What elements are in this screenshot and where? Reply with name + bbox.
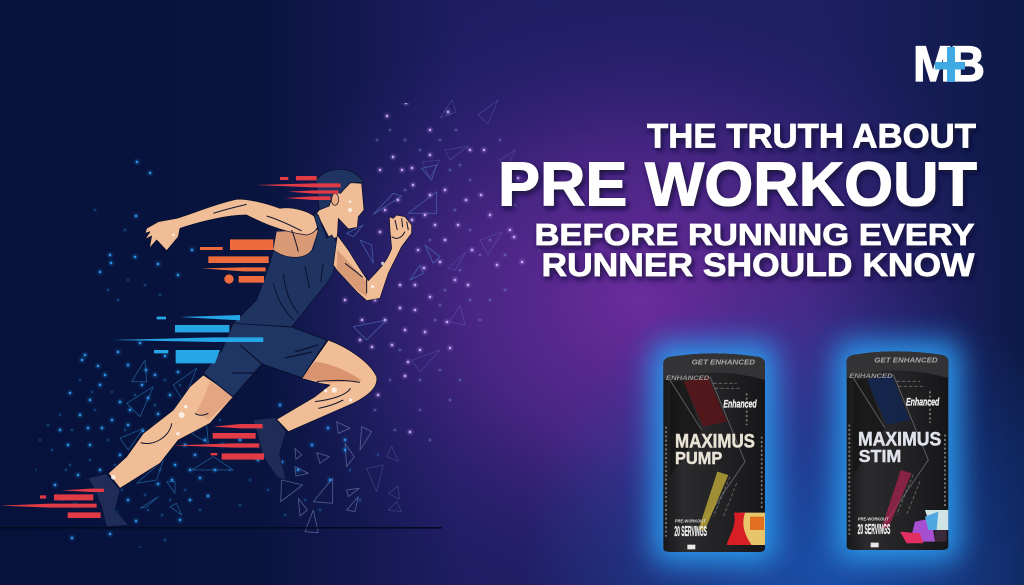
ground line bbox=[0, 527, 442, 529]
back leg bbox=[108, 375, 234, 488]
speed lines: red lower bbox=[0, 350, 264, 518]
runner figure bbox=[0, 169, 412, 527]
title bbox=[498, 118, 977, 283]
shorts bbox=[203, 323, 327, 397]
can text: GET ENHANCED bbox=[692, 357, 756, 366]
can text bbox=[666, 357, 757, 540]
back leg, shoe and front leg bbox=[88, 340, 377, 527]
ear bbox=[331, 193, 339, 205]
front shoe bbox=[253, 418, 286, 480]
speed lines: orange, blue and red upper bbox=[112, 176, 341, 342]
can text: MAXIMUS bbox=[858, 429, 941, 450]
neck and face bbox=[317, 183, 364, 239]
particle field: blue dots behind runner bbox=[35, 103, 540, 548]
title line: before running every: BEFORE RUNNING EVERY bbox=[534, 218, 974, 252]
can text: PUMP bbox=[675, 448, 722, 468]
logo: M+B: M bbox=[913, 36, 953, 92]
front arm and fist bbox=[333, 215, 412, 301]
title line: pre workout: PRE WORKOUT bbox=[498, 150, 977, 220]
back shoe bbox=[88, 474, 128, 527]
product: Maximus Stim can bbox=[847, 351, 948, 550]
flavor art bbox=[925, 510, 948, 530]
can text: STIM bbox=[859, 446, 901, 466]
can text: MAXIMUS bbox=[675, 431, 755, 452]
upper body bbox=[145, 169, 412, 327]
can text: Enhanced bbox=[723, 398, 757, 410]
chest skin under arm bbox=[273, 230, 318, 258]
tank top bbox=[233, 213, 337, 327]
front thigh and calf bbox=[277, 340, 377, 432]
motion highlights bbox=[111, 387, 352, 480]
can text: Enhanced bbox=[906, 396, 940, 408]
title line: the truth about: THE TRUTH ABOUT bbox=[647, 118, 976, 156]
can text: GET ENHANCED bbox=[874, 355, 938, 364]
can text: PRE-WORKOUT bbox=[675, 518, 706, 523]
back arm bbox=[145, 199, 318, 251]
can glows bbox=[652, 341, 960, 563]
flavor art bbox=[740, 513, 765, 545]
hair bbox=[316, 169, 364, 210]
logo: M+B: B bbox=[950, 36, 985, 92]
can text: 20 SERVINGS bbox=[674, 524, 707, 540]
can text: ENHANCED bbox=[849, 373, 893, 380]
can text: PRE-WORKOUT bbox=[858, 516, 889, 521]
can text bbox=[849, 355, 941, 538]
can text: 20 SERVINGS bbox=[858, 522, 890, 538]
can text: ENHANCED bbox=[666, 375, 710, 382]
particle field: triangle shards bbox=[120, 100, 515, 533]
title line: runner should know: RUNNER SHOULD KNOW bbox=[542, 247, 975, 283]
arm highlights bbox=[172, 200, 384, 288]
logo: M+B bbox=[913, 36, 985, 92]
product: Maximus Pump can bbox=[663, 353, 765, 552]
